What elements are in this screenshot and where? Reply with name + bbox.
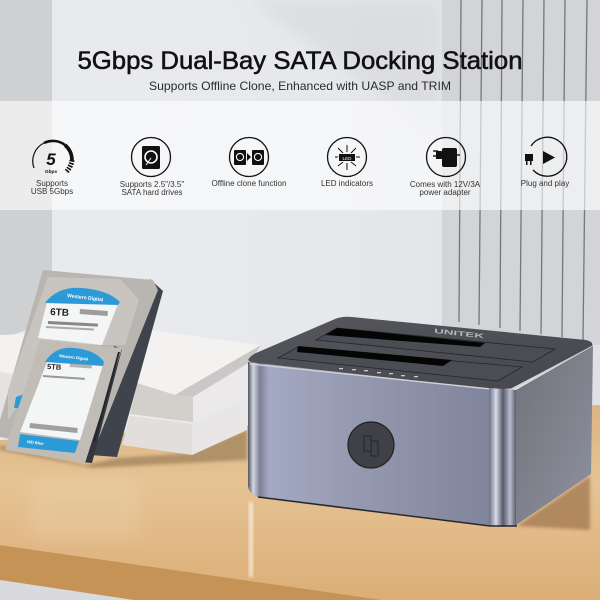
hard drives bbox=[0, 270, 163, 463]
caption: LED indicators bbox=[321, 179, 373, 188]
lower slot bbox=[297, 346, 452, 366]
caption: power adapter bbox=[419, 188, 471, 197]
LED indicators bbox=[339, 368, 418, 377]
feature: SATA drives bbox=[120, 138, 184, 197]
icon: LED: LED bbox=[343, 156, 352, 161]
bottom book bbox=[122, 416, 192, 455]
caption: Supports bbox=[36, 179, 68, 188]
wood desk bbox=[0, 405, 600, 600]
icon: clone drives bbox=[230, 138, 268, 176]
feature: offline clone bbox=[212, 138, 286, 188]
label: 6TB: 6TB bbox=[50, 307, 69, 319]
clone button bbox=[348, 422, 394, 468]
small hard drive: Western Digital bbox=[59, 353, 88, 362]
caption: USB 5Gbps bbox=[31, 187, 73, 196]
caption: SATA hard drives bbox=[121, 188, 183, 197]
window rods bbox=[459, 0, 587, 340]
caption: Supports 2.5"/3.5" bbox=[120, 180, 184, 189]
docking station bbox=[248, 317, 593, 527]
icon: speed gauge: 5 bbox=[46, 150, 56, 169]
brand logo: UNITEK bbox=[434, 328, 485, 340]
feature: LED indicators bbox=[321, 138, 373, 188]
caption: Comes with 12V/3A bbox=[410, 180, 481, 189]
large hard drive bbox=[0, 270, 163, 457]
bottom edge bbox=[258, 497, 517, 526]
corner highlight bbox=[489, 388, 517, 527]
top book bbox=[0, 330, 261, 395]
upper tray bbox=[316, 328, 555, 362]
subtitle: Supports Offline Clone, Enhanced with UASP and TRIM bbox=[149, 79, 451, 93]
top plate bbox=[248, 317, 592, 390]
icon: speed gauge bbox=[33, 141, 72, 175]
stacked white boxes bbox=[0, 330, 261, 455]
upper slot bbox=[325, 328, 485, 347]
feature: plug and play bbox=[521, 137, 569, 188]
front face bbox=[248, 362, 507, 526]
lower tray bbox=[278, 347, 522, 381]
icon: speed gauge: Gbps bbox=[45, 169, 57, 175]
caption: Offline clone function bbox=[212, 179, 286, 188]
caption: Plug and play bbox=[521, 179, 569, 188]
large hard drive: Western Digital bbox=[67, 293, 104, 303]
label: 5TB: 5TB bbox=[47, 362, 62, 372]
small hard drive: WD Blue bbox=[27, 439, 45, 446]
blue label header bbox=[45, 288, 120, 305]
left stack edge bbox=[0, 372, 20, 437]
icon: adapter bbox=[426, 138, 466, 176]
small hard drive bbox=[5, 340, 122, 463]
metal top edge bbox=[250, 346, 593, 390]
feature: power adapter bbox=[410, 138, 481, 197]
blue sliver bbox=[14, 394, 24, 408]
icon: hard drive bbox=[132, 138, 170, 176]
icon: plug and play bbox=[525, 137, 567, 176]
title: 5Gbps Dual-Bay SATA Docking Station bbox=[78, 47, 522, 75]
feature: USB 5Gbps bbox=[31, 141, 73, 196]
white label bbox=[38, 302, 118, 345]
right side face bbox=[516, 346, 593, 525]
translucent icon band bbox=[0, 101, 600, 210]
middle book bbox=[130, 383, 193, 422]
